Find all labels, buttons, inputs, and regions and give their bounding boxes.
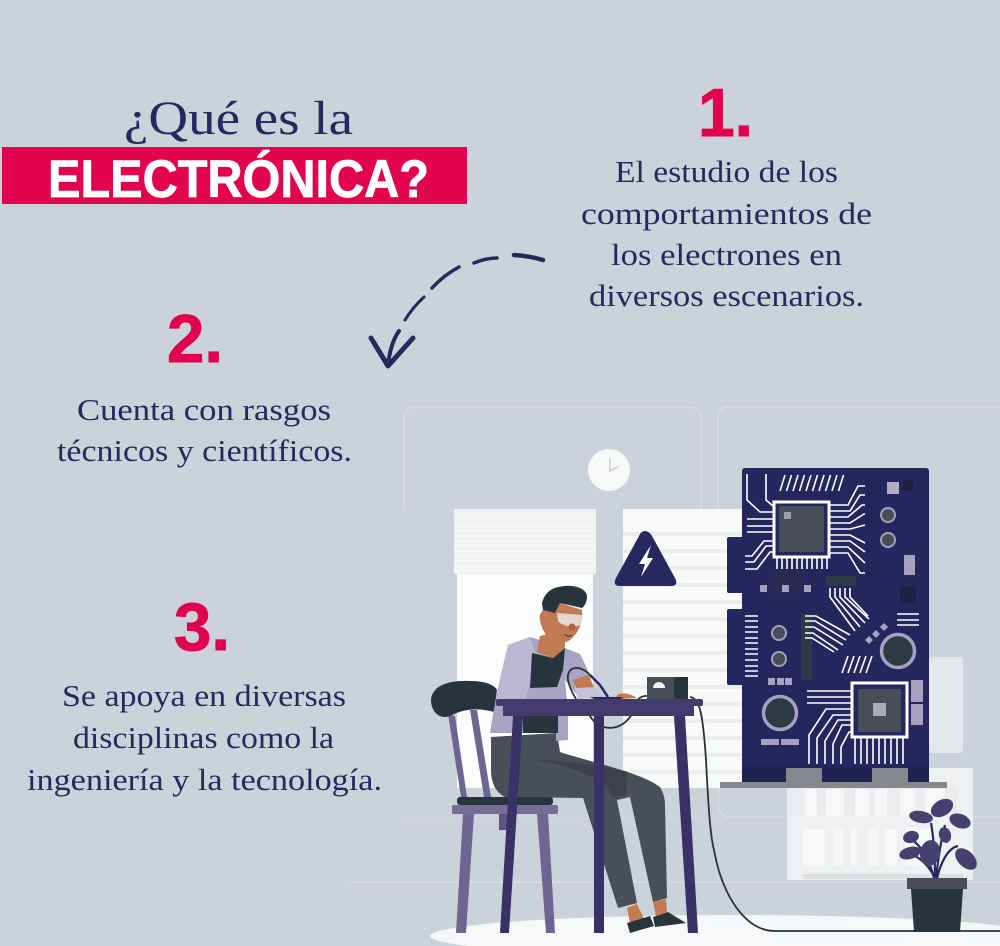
point 1: los electrones en — [611, 237, 843, 272]
cable — [690, 697, 1000, 931]
plant — [898, 795, 981, 932]
point 1 — [581, 75, 872, 313]
point 1: comportamientos de — [581, 196, 872, 231]
point 1: El estudio de los — [615, 154, 838, 189]
board components — [760, 482, 923, 745]
soldering station — [590, 677, 688, 699]
circuit traces — [745, 474, 919, 764]
neck and head — [537, 630, 565, 658]
point 3: disciplinas como la — [73, 720, 334, 755]
shelf — [720, 782, 947, 788]
circuit board — [727, 468, 929, 782]
legs — [491, 733, 667, 908]
title: ELECTRÓNICA? — [48, 149, 429, 209]
arm and tool — [573, 675, 594, 688]
title — [2, 92, 467, 209]
window right — [623, 509, 743, 788]
feet — [627, 899, 667, 923]
chip 2 — [852, 683, 907, 737]
point 2: 2. — [167, 301, 223, 377]
point 2: técnicos y científicos. — [57, 433, 352, 468]
chip 1 — [774, 502, 829, 557]
bookshelf — [787, 657, 973, 880]
point 3: Se apoya en diversas — [62, 678, 346, 713]
icon: clock — [588, 449, 630, 491]
point 2 — [57, 301, 352, 468]
point 2: Cuenta con rasgos — [77, 392, 331, 427]
room background — [350, 407, 1000, 882]
table — [496, 699, 703, 933]
point 3: ingeniería y la tecnología. — [27, 762, 382, 797]
person — [490, 586, 686, 933]
point 1: 1. — [698, 75, 753, 151]
dashed arrow — [371, 255, 543, 366]
point 1: diversos escenarios. — [589, 278, 864, 313]
chair — [431, 681, 558, 933]
point 3 — [27, 589, 382, 797]
point 3: 3. — [174, 589, 230, 665]
floor — [430, 915, 1000, 946]
icon: warning — [615, 531, 676, 586]
window left — [454, 509, 596, 788]
jacket — [490, 637, 596, 741]
shirt — [530, 648, 565, 688]
title: ¿Qué es la — [124, 92, 353, 145]
